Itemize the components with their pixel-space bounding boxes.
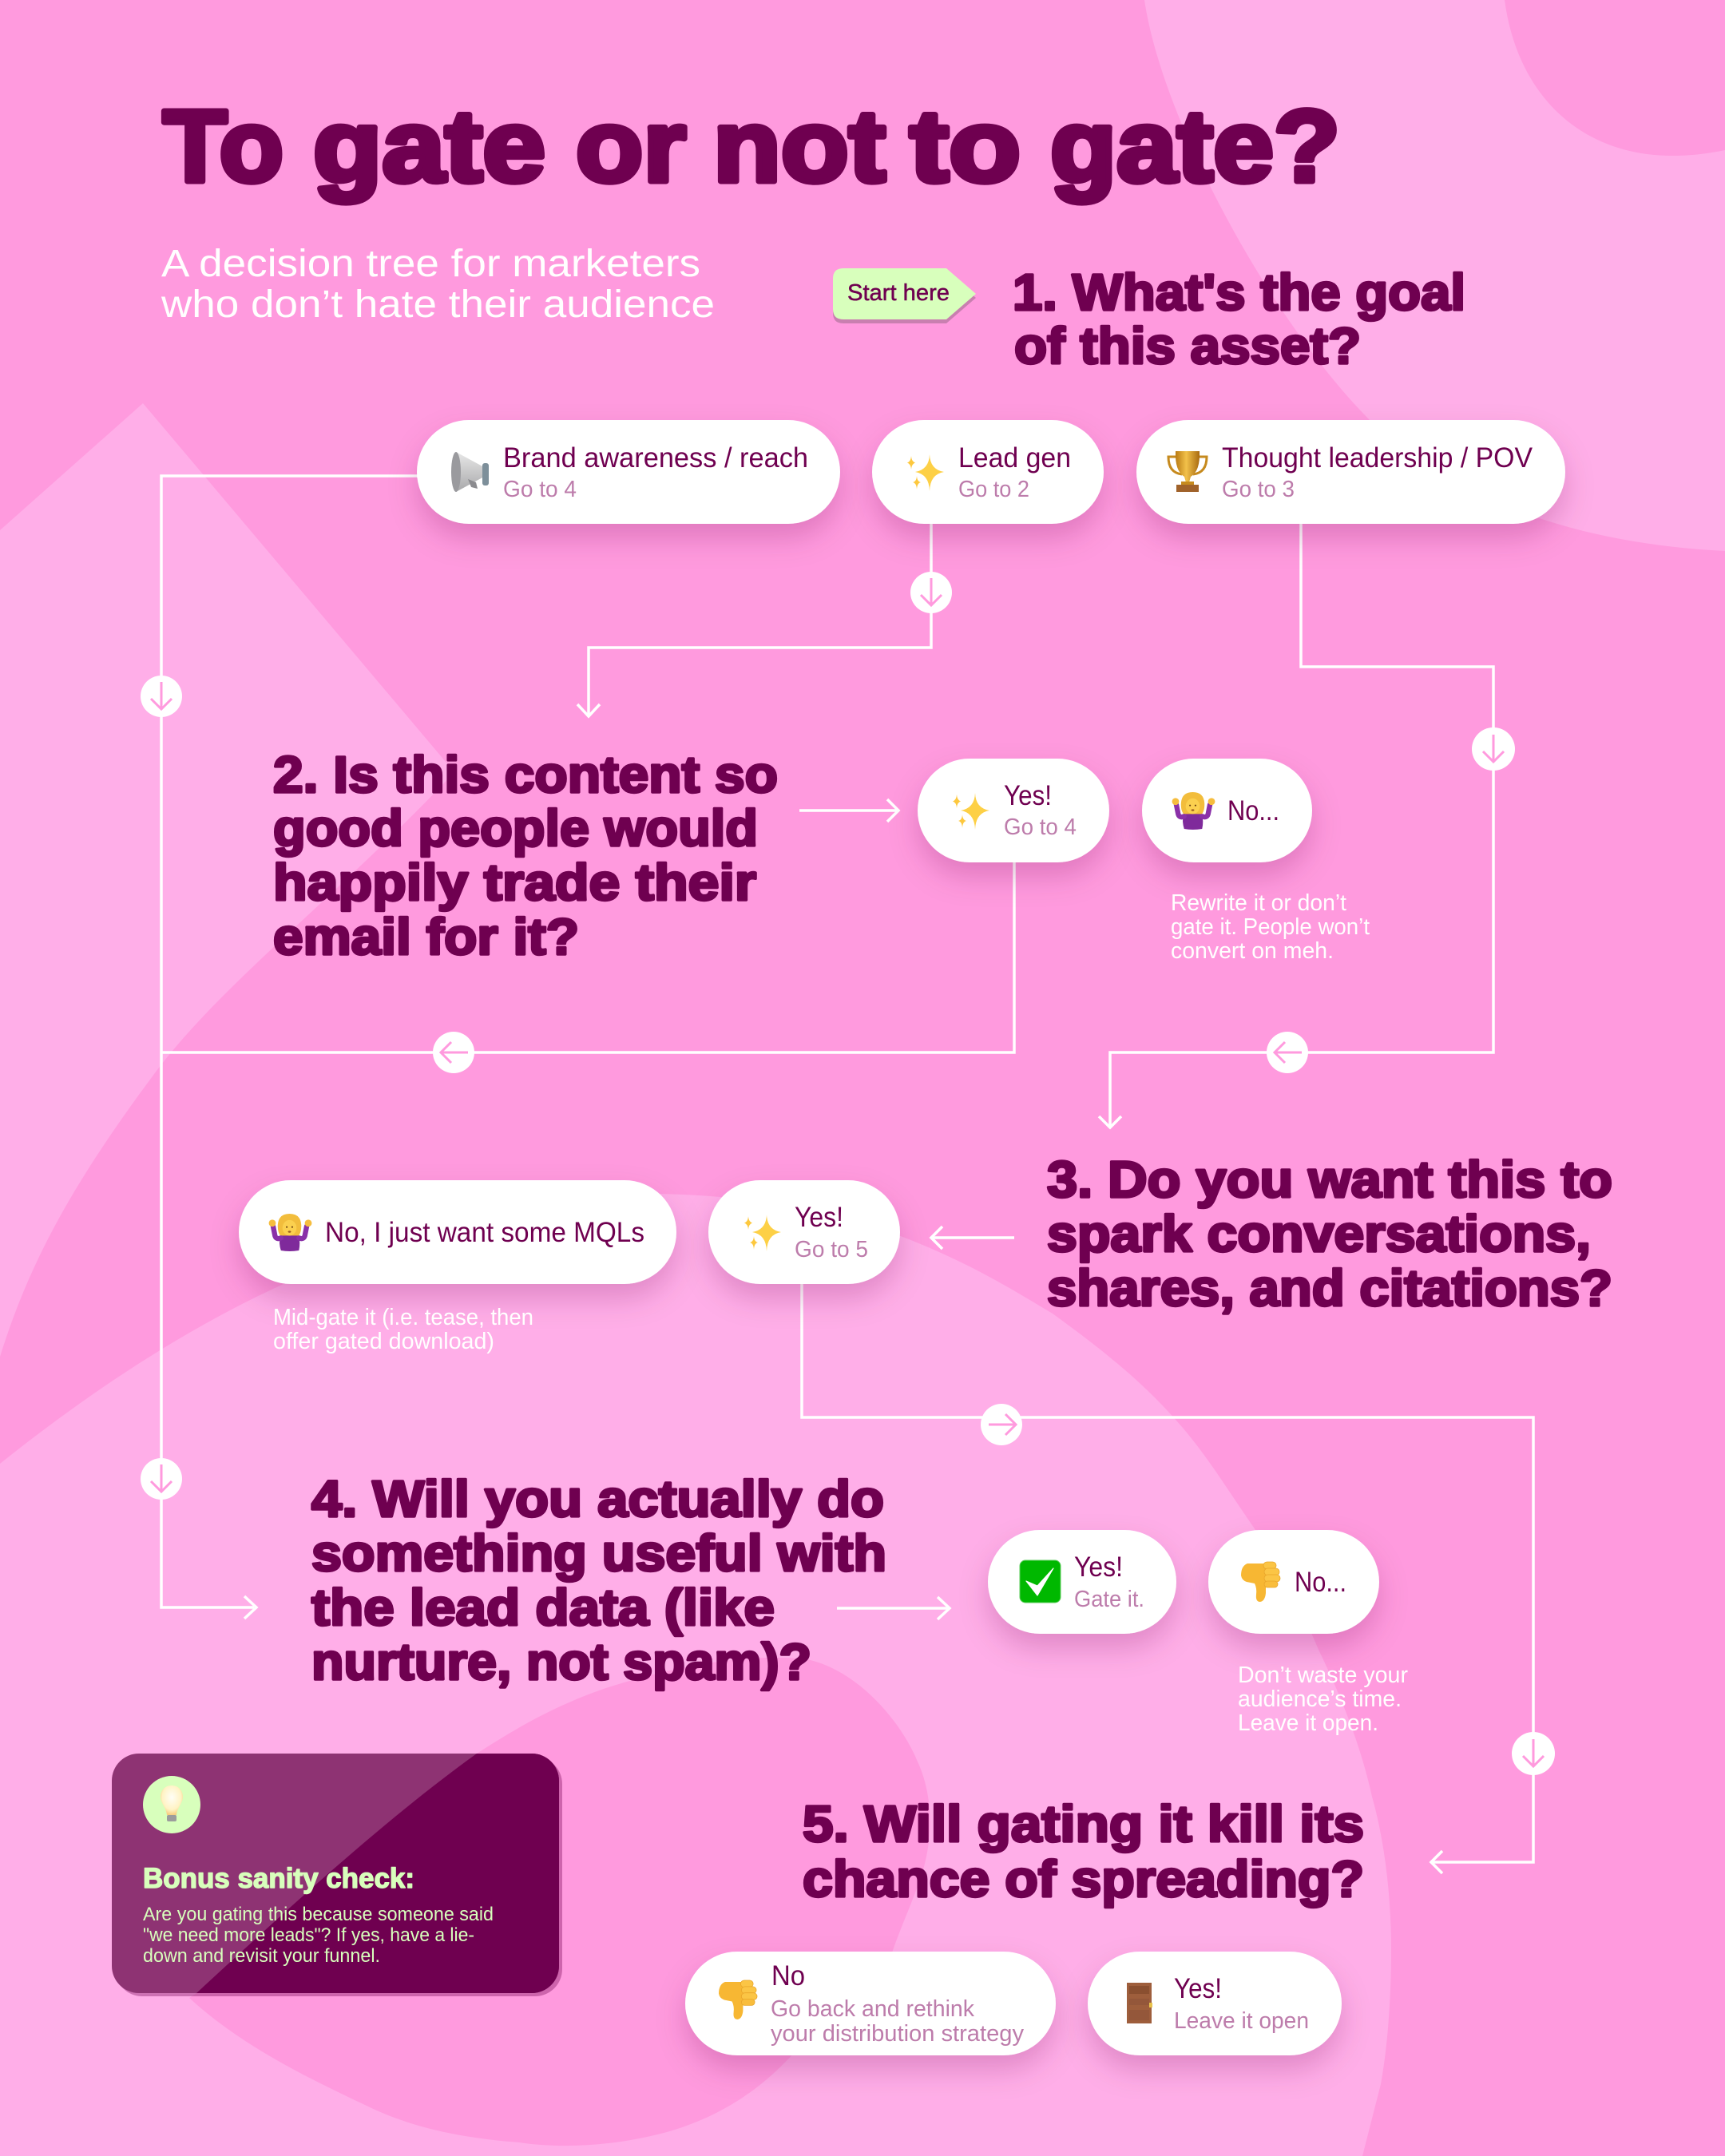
pill: no waste [1208,1530,1379,1634]
question 1: of this asset? [1014,317,1361,375]
question 4: nurture, not spam)? [311,1633,811,1690]
note: rewrite: convert on meh. [1171,938,1334,964]
card body text [143,1904,494,1967]
subtitle: A decision tree for marketers [161,243,700,285]
question 5: 5. Will gating it kill its [803,1795,1364,1853]
pill: yes go to 5 [708,1180,900,1284]
question 2: email for it? [273,908,579,965]
flow connector: lead gen to question 2 [577,524,931,716]
icon: shrugging person [269,1214,311,1251]
arrow badge: down on left line [141,676,182,717]
question 4 [311,1470,886,1690]
pill: no rethink: your distribution strategy [771,2021,1024,2047]
arrow badge: down on right line [1472,727,1515,771]
start here tag: Start here [847,280,950,306]
pill: brand awareness [417,420,840,524]
note: mid-gate: offer gated download) [273,1329,494,1354]
pill: lead gen [872,420,1104,524]
pill: thought leadership: Go to 3 [1222,477,1295,502]
icon: door [1127,1983,1152,2023]
pill: yes gate it [988,1530,1176,1634]
note: don't waste: Leave it open. [1238,1710,1378,1736]
pill: yes gate it: Yes! [1074,1552,1123,1583]
question 2: good people would [273,799,758,857]
pill: yes go to 4: Go to 4 [1004,814,1077,840]
title: to [910,89,1021,204]
pill: no rewrite: No... [1227,795,1279,826]
title [163,89,1340,204]
title: To [163,89,284,204]
flow connector: yes to question 4 [161,862,1014,1052]
arrow badge: down on left line lower [141,1458,182,1500]
question 1: 1. What's the goal [1013,264,1465,321]
arrow badge: down from lead gen [910,572,952,613]
question 3: spark conversations, [1047,1205,1591,1262]
icon: sparkles [907,454,944,491]
question 3 [1047,1151,1612,1317]
pill: brand awareness: Brand awareness / reach [503,442,808,474]
icon: trophy [1168,451,1207,492]
pill: thought leadership [1136,420,1565,524]
pill: no just MQLs: No, I just want some MQLs [325,1217,644,1248]
pill: brand awareness: Go to 4 [503,477,577,502]
pill: yes go to 4: Yes! [1004,780,1052,811]
arrow badge: left [433,1032,474,1073]
pill: lead gen: Lead gen [958,442,1071,474]
card body text: down and revisit your funnel. [143,1945,380,1967]
pill: yes go to 4 [918,759,1109,862]
icon: thumbs down [719,1980,757,2019]
arrow badge: left on right line [1267,1032,1308,1073]
pill: yes leave open: Leave it open [1174,2008,1309,2034]
title: not [713,89,886,204]
pill: no rethink [685,1952,1056,2055]
pill: thought leadership: Thought leadership / POV [1222,442,1533,474]
arrow: question 2 to yes [799,799,898,822]
flow connector: yes to question 5 [802,1284,1533,1873]
icon: check mark [1020,1560,1061,1603]
bonus card [112,1754,562,1996]
icon: sparkles [953,793,989,830]
question 2: happily trade their [273,854,756,911]
question 5: chance of spreading? [803,1850,1364,1908]
title: or [576,89,686,204]
question 1 [1013,264,1465,375]
subtitle: who don’t hate their audience [161,283,715,326]
pill: no rethink: No [771,1960,805,1992]
pill: yes leave open: Yes! [1174,1973,1222,2004]
arrow badge: right [981,1404,1022,1445]
pill: yes go to 5: Yes! [795,1202,843,1233]
title: gate? [1050,89,1340,204]
icon: megaphone [451,452,489,492]
question 4: something useful with [311,1524,886,1582]
card body text: "we need more leads"? If yes, have a lie- [143,1924,474,1946]
note: don't waste: audience’s time. [1238,1686,1402,1712]
question 2 [273,746,778,965]
pill: yes gate it: Gate it. [1074,1587,1144,1612]
pill: yes leave open [1088,1952,1342,2055]
note: don't waste [1238,1663,1408,1736]
icon: thumbs down [1241,1562,1280,1602]
subtitle [161,243,715,326]
flow connector: thought leadership to question 3 [1099,524,1493,1128]
note: rewrite [1171,890,1370,964]
question 3: shares, and citations? [1047,1259,1612,1317]
card body text: Are you gating this because someone said [143,1904,494,1925]
note: rewrite: gate it. People won’t [1171,914,1370,940]
arrow badge: down to question 5 [1512,1732,1555,1775]
pill: no rewrite [1142,759,1312,862]
question 4: the lead data (like [311,1579,775,1636]
question 3: 3. Do you want this to [1047,1151,1612,1208]
title: gate [313,89,545,204]
arrow: question 3 to yes [931,1227,1014,1249]
question 5 [803,1795,1364,1908]
flow connector: brand awareness to question 4 [161,476,418,1619]
question 2: 2. Is this content so [273,746,778,803]
pill: no rethink: Go back and rethink [771,1996,974,2022]
bonus card: Bonus sanity check: [143,1863,414,1894]
note: mid-gate: Mid-gate it (i.e. tease, then [273,1305,533,1330]
start here tag [833,268,976,323]
note: don't waste: Don’t waste your [1238,1663,1408,1688]
note: mid-gate [273,1305,533,1354]
note: rewrite: Rewrite it or don’t [1171,890,1346,916]
icon: sparkles [744,1215,781,1251]
icon: light bulb [143,1776,200,1833]
pill: no just MQLs [239,1180,676,1284]
question 4: 4. Will you actually do [311,1470,884,1528]
pill: no waste: No... [1295,1567,1346,1598]
icon: shrugging person [1172,792,1215,830]
pill: lead gen: Go to 2 [958,477,1029,502]
pill: yes go to 5: Go to 5 [795,1237,868,1262]
arrow: question 4 to yes [837,1597,950,1619]
